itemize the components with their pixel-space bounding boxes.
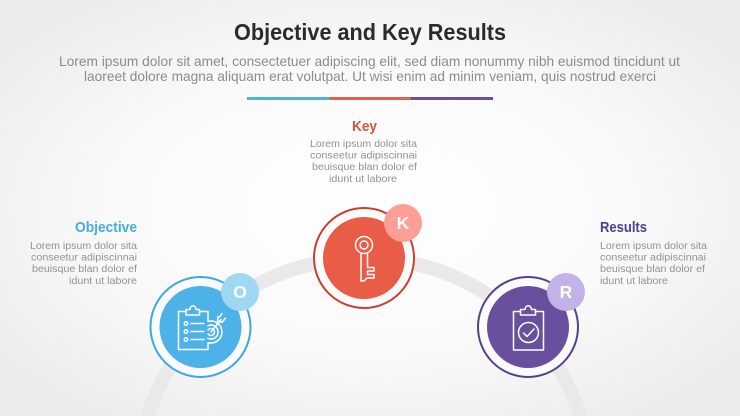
description: key: Lorem ipsum dolor sita	[310, 139, 417, 150]
description: results: conseetur adipiscinnai	[600, 252, 706, 264]
panel: objective text	[30, 219, 137, 287]
icon: clipboard with target	[178, 306, 226, 350]
panel: key text	[310, 118, 417, 185]
node: results	[478, 273, 585, 377]
description: objective: idunt ut labore	[69, 276, 137, 287]
description: key: idunt ut labore	[329, 174, 397, 185]
description: objective: beuisque blan dolor ef	[32, 264, 137, 275]
connecting arc	[140, 251, 588, 416]
description: results: idunt ut labore	[600, 276, 668, 287]
panel: results text	[600, 219, 707, 287]
icon: key	[356, 236, 374, 281]
icon: clipboard with check	[514, 306, 544, 350]
description: objective: Lorem ipsum dolor sita	[30, 241, 137, 252]
node: key	[314, 204, 422, 308]
heading: objective: Objective	[75, 219, 137, 236]
title: Objective and Key Results	[234, 19, 506, 45]
description: objective: conseetur adipiscinnai	[31, 252, 137, 264]
description: results	[600, 241, 707, 287]
heading: results: Results	[600, 219, 647, 236]
description: key	[310, 139, 417, 185]
tricolour divider	[247, 97, 493, 100]
description: key: conseetur adipiscinnai	[310, 150, 417, 162]
node: objective	[150, 273, 259, 377]
intro text: Lorem ipsum dolor sit amet, consectetuer adipiscing elit, sed diam nonummy nibh euismod tincidunt ut	[59, 53, 680, 69]
heading: key: Key	[352, 118, 378, 135]
badge: R: R	[560, 282, 573, 302]
description: key: beuisque blan dolor ef	[312, 162, 417, 173]
intro text: laoreet dolore magna aliquam erat volutpat. Ut wisi enim ad minim veniam, quis nostrud exerci	[84, 68, 656, 84]
description: objective	[30, 241, 137, 287]
badge: O: O	[233, 282, 247, 302]
description: results: Lorem ipsum dolor sita	[600, 241, 707, 252]
intro text	[59, 53, 680, 84]
description: results: beuisque blan dolor ef	[600, 264, 705, 275]
badge: K: K	[397, 213, 410, 233]
